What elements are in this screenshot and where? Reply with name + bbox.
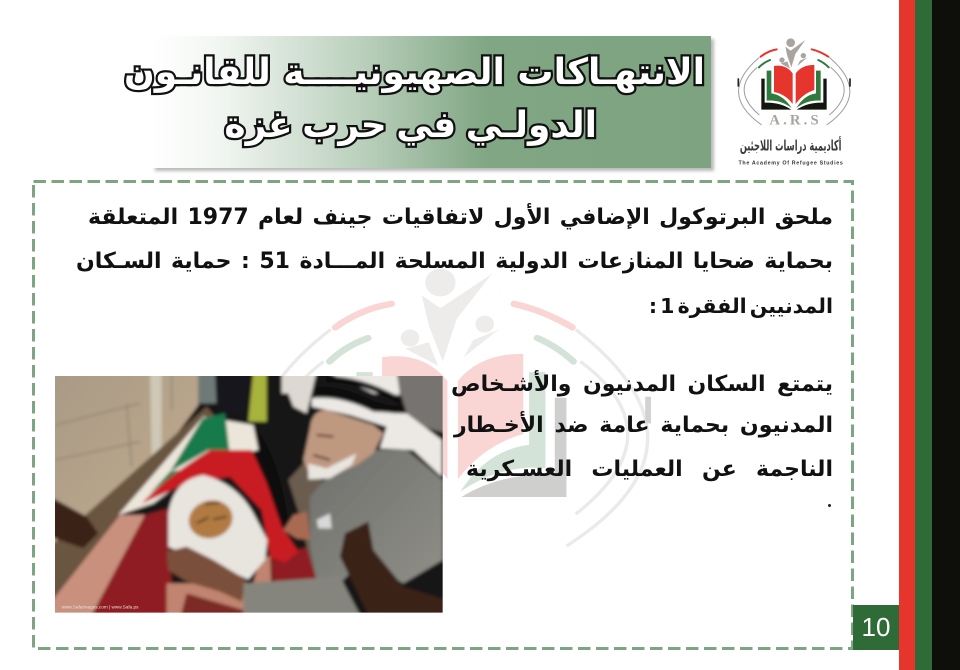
- face: [186, 498, 234, 540]
- logo English name: The Academy Of Refugee Studies: [739, 160, 843, 166]
- trailing full stop: [828, 504, 831, 507]
- elder face: [303, 410, 383, 477]
- bystanders: [198, 372, 217, 403]
- photo credit: www.SafaImages.com | www.Safa.ps: [62, 605, 139, 610]
- paragraph 1 line 1: ملحق البرتوكول الإضافي الأول لاتفاقيات جينف لعام 1977 المتعلقة: [88, 205, 833, 230]
- logo: Academy of Refugee Studies: [738, 38, 851, 166]
- head wrap: [168, 475, 267, 579]
- paragraph 1 line 2: بحماية ضحايا المنازعات الدولية المسلحة المـــادة 51 : حماية السـكان: [76, 249, 833, 274]
- dashed content frame: [32, 180, 854, 650]
- page number box: 10: [862, 612, 890, 642]
- paragraph 2 line 3: الناجمة عن العمليات العسـكرية: [466, 457, 833, 482]
- title line 2: الدولـي في حرب غزة: [224, 105, 597, 146]
- flag red band: [142, 450, 298, 563]
- paragraph 1 line 3: المدنيين الفقرة 1 :: [649, 294, 833, 318]
- photo: mourning over child wrapped in Palestinian flag: [55, 376, 443, 613]
- page number box: [853, 605, 899, 650]
- title line 1: الانتهـاكات الصهيونيــــة للقانـون: [124, 52, 705, 93]
- hands: [283, 512, 310, 540]
- body shroud: [255, 433, 288, 524]
- elder robe: [286, 462, 324, 572]
- title banner: [152, 36, 711, 168]
- keffiyeh: [327, 372, 400, 395]
- left arm: [55, 498, 98, 549]
- paragraph 2 line 2: المدنيون بحماية عامة ضد الأخـطار: [454, 413, 833, 438]
- paragraph 2 line 1: يتمتع السكان المدنيون والأشـخاص: [451, 372, 833, 397]
- carpet: [50, 515, 145, 618]
- photo wall: [50, 372, 198, 557]
- right side stripes: [899, 0, 960, 670]
- logo initials: A.R.S: [769, 113, 819, 129]
- flag green band: [170, 413, 229, 472]
